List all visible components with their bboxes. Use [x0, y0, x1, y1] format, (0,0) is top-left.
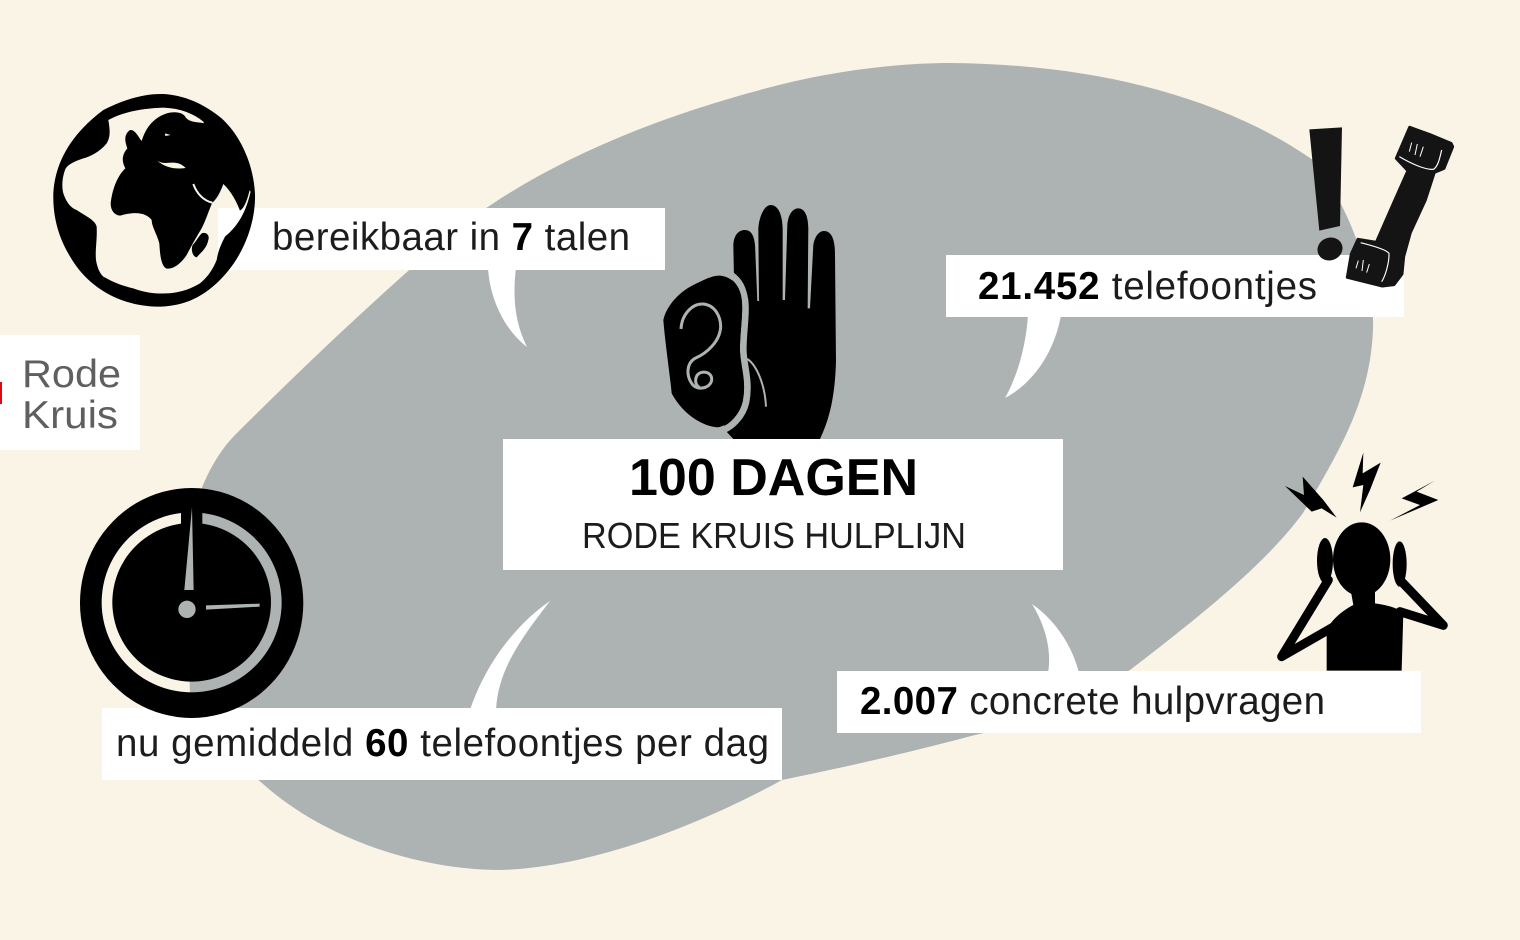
- lightning bolts: [1285, 453, 1438, 521]
- logo: Rode Kruis: Kruis: [22, 394, 118, 437]
- text: nu gemiddeld 60 telefoontjes per dag: nu gemiddeld 60 telefoontjes per dag: [116, 722, 769, 765]
- grey background blob: [189, 63, 1373, 870]
- title panel: [503, 439, 1063, 570]
- logo mark: [0, 382, 2, 404]
- heading: 100 DAGEN: 100 DAGEN: [629, 449, 918, 507]
- icon: person covering ears with lightning bolts: [1282, 453, 1443, 671]
- land: Eurasia and Africa: [111, 112, 249, 269]
- text: bereikbaar in 7 talen: bereikbaar in 7 talen: [272, 216, 630, 259]
- icon: exclamation mark and telephone handset: [1309, 127, 1453, 286]
- icon: clock: [80, 488, 303, 718]
- icon: globe: [53, 94, 255, 307]
- logo: Rode Kruis: [0, 335, 140, 450]
- land: Madagascar: [192, 233, 209, 257]
- text: 2.007 concrete hulpvragen: 2.007 concrete hulpvragen: [860, 680, 1325, 723]
- logo text: Rode: [22, 353, 121, 396]
- subheading: RODE KRUIS HULPLIJN: [582, 515, 966, 556]
- callout: 21.452 telefoontjes: [946, 255, 1404, 398]
- clock hands: [184, 507, 260, 610]
- callout: bereikbaar in 7 talen: [218, 208, 665, 347]
- icon: hand and ear: [663, 205, 836, 439]
- callout: nu gemiddeld 60 telefoontjes per dag: [102, 601, 782, 780]
- inland seas: [157, 133, 186, 168]
- callout: 2.007 concrete hulpvragen: [837, 604, 1421, 733]
- text: 21.452 telefoontjes: 21.452 telefoontjes: [978, 265, 1317, 308]
- ear: [663, 276, 744, 427]
